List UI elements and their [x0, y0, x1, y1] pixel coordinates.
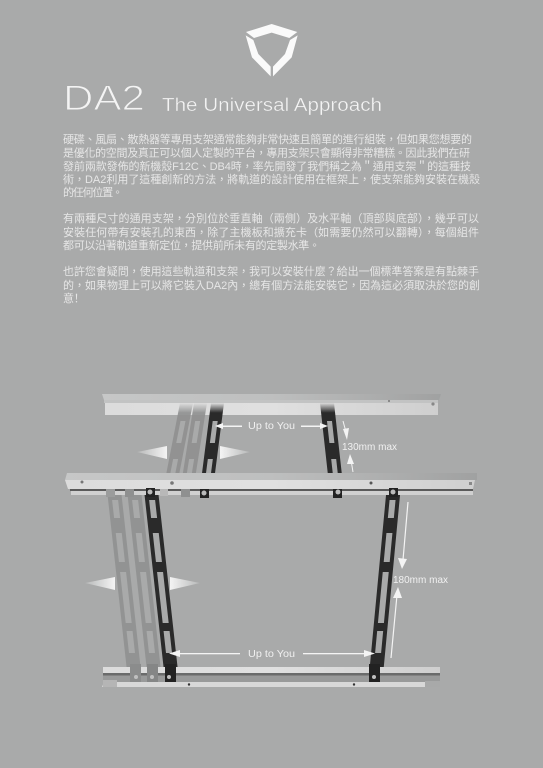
arrow: lower slide left	[85, 577, 115, 590]
text block: intro paragraph 1: 的任何位置。	[63, 185, 123, 199]
arrow: 180mm up	[391, 587, 402, 658]
subtitle: The Universal Approach: The Universal Approach	[162, 94, 382, 115]
text block: paragraph 3: 的，如果物理上可以將它裝入DA2內，總有個方法能安裝它，因為這必須取決於您的創	[63, 278, 480, 292]
text block: intro paragraph 1: 硬碟、風扇、散熱器等專用支架通常能夠非常快速且簡單的進行組裝，但如果您想要的	[63, 132, 472, 146]
arrow: lower slide right	[170, 577, 200, 590]
bracket: upper black right	[320, 403, 342, 473]
logo: shield emblem	[246, 24, 298, 76]
bracket: lower black left	[144, 490, 178, 668]
bracket: lower ghost positions	[107, 490, 161, 670]
clamps on bottom rail	[130, 664, 380, 682]
text block: intro paragraph 1: 術，DA2利用了這種創新的方法，將軌道的設計使用在框架上，使支架能夠安裝在機殼	[63, 172, 480, 186]
clamps on middle rail	[106, 488, 398, 498]
text block: paragraph 2: 有兩種尺寸的通用支架，分別位於垂直軸（兩側）及水平軸（頂部與底部），幾乎可以	[63, 211, 479, 225]
arrow: upper slide right	[220, 446, 250, 459]
diagram: upper rail assembly	[102, 394, 441, 415]
text block: paragraph 2: 都可以沿著軌道重新定位，提供前所未有的定製水準。	[63, 238, 320, 252]
label: Up to You lower: Up to You	[248, 649, 295, 660]
arrow: 130mm down	[343, 421, 349, 440]
bracket: upper black left	[202, 403, 224, 473]
arrow: upper Up to You right	[301, 423, 328, 429]
text block: paragraph 2	[63, 211, 479, 252]
title: DA2: DA2	[63, 79, 145, 118]
text block: intro paragraph 1: 是優化的空間及真正可以個人定製的平台，專用支架只會顯得非常糟糕。因此我們在研	[63, 146, 470, 160]
text block: paragraph 3: 意！	[63, 291, 82, 305]
bracket: upper ghost positions	[166, 403, 207, 473]
text block: paragraph 3: 也許您會疑問，使用這些軌道和支架，我可以安裝什麼？給出一個標準答案是有點棘手	[63, 264, 479, 278]
label: Up to You upper: Up to You	[248, 421, 295, 432]
text block: intro paragraph 1: 發前兩款發佈的新機殼F12C、DB4時，率先開發了我們稱之為＂通用支架＂的這種技	[63, 159, 471, 173]
arrow: upper slide left	[137, 446, 167, 459]
text block: intro paragraph 1	[63, 132, 480, 199]
diagram: bottom rail	[102, 667, 440, 687]
label: 180mm max: 180mm max	[393, 575, 448, 586]
text block: paragraph 3	[63, 264, 480, 305]
arrow: 180mm down	[398, 502, 408, 569]
arrow: lower Up to You left	[169, 650, 240, 657]
arrow: upper Up to You left	[215, 423, 242, 429]
arrow: lower Up to You right	[303, 650, 375, 657]
diagram: middle rail	[65, 473, 477, 495]
arrow: 130mm up	[347, 454, 354, 472]
text block: paragraph 2: 安裝任何帶有安裝孔的東西，除了主機板和擴充卡（如需要仍然可以翻轉），每個組件	[63, 225, 479, 239]
bracket: lower black right	[370, 490, 400, 668]
label: 130mm max: 130mm max	[342, 442, 397, 453]
